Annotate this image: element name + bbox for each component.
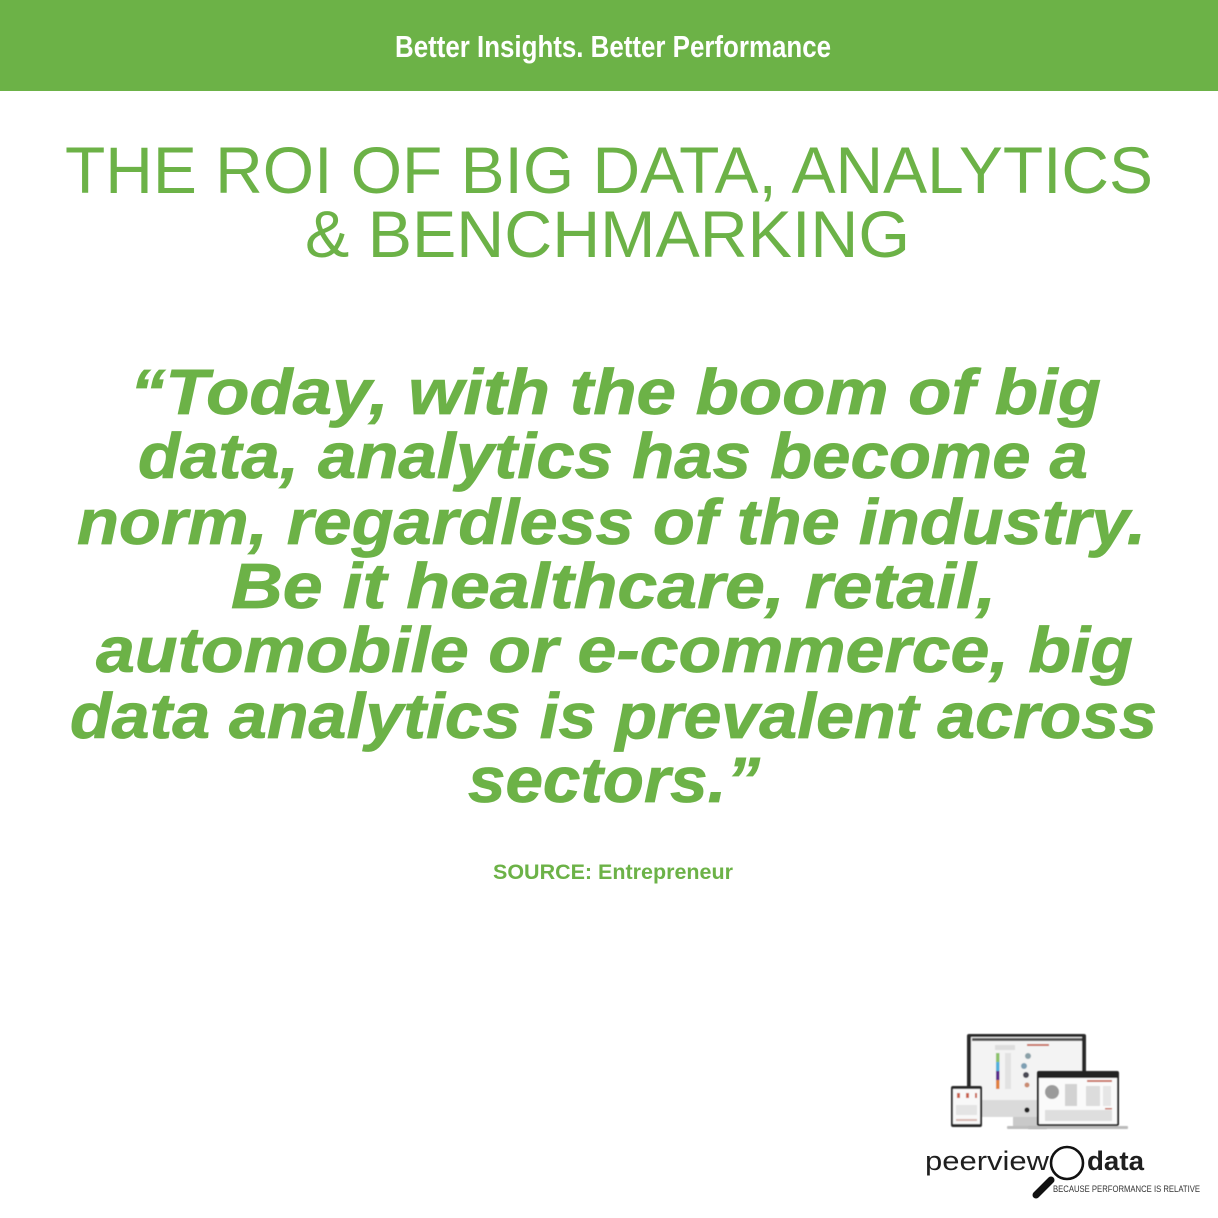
- title: [65, 133, 1153, 271]
- quote: Be it healthcare, retail,: [231, 550, 996, 622]
- logo wordmark: [925, 1146, 1145, 1176]
- quote: automobile or e-commerce, big: [96, 614, 1133, 686]
- header tagline: Better Insights. Better Performance: [395, 29, 831, 64]
- logo wordmark: peerview: [925, 1146, 1050, 1176]
- quote: “Today, with the boom of big: [130, 356, 1101, 428]
- quote: data, analytics has become a: [138, 420, 1088, 492]
- quote: data analytics is prevalent across: [70, 680, 1157, 752]
- icon: laptop: [1028, 1071, 1128, 1129]
- source line: SOURCE: Entrepreneur: [493, 861, 733, 884]
- quote: sectors.”: [468, 744, 760, 816]
- icon: magnifying glass: [1036, 1147, 1083, 1195]
- logo wordmark: data: [1087, 1146, 1145, 1176]
- icon: tablet: [951, 1086, 982, 1127]
- header band: [0, 0, 1218, 91]
- title: & BENCHMARKING: [305, 197, 910, 271]
- quote: [70, 356, 1157, 816]
- logo block: [925, 1034, 1200, 1195]
- title: THE ROI OF BIG DATA, ANALYTICS: [65, 133, 1153, 207]
- icon: desktop monitor: [967, 1034, 1086, 1129]
- quote: norm, regardless of the industry.: [77, 486, 1146, 558]
